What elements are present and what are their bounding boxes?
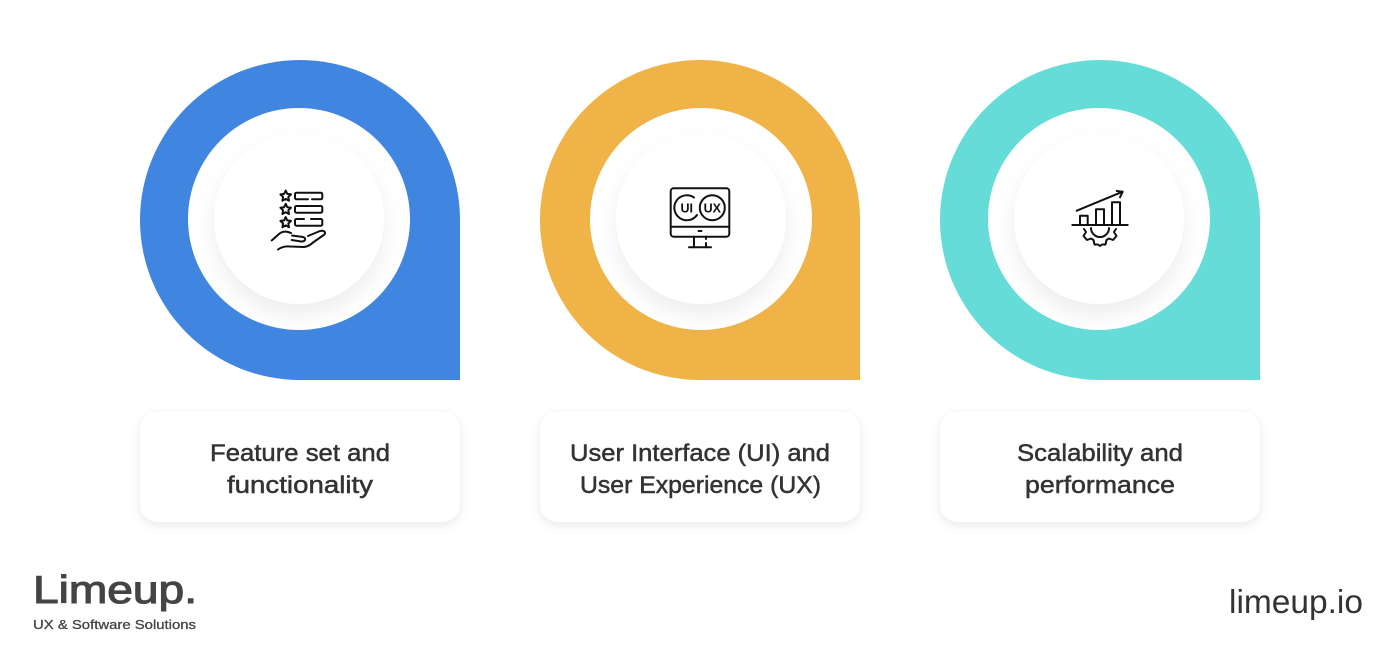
icon: monitor with UI and UX: UX [704,201,722,215]
panel: feature set [140,60,460,522]
logo: UX & Software Solutions [33,617,197,632]
blue teardrop [140,60,460,380]
label card: performance [1025,472,1175,499]
label card [940,412,1260,522]
teal teardrop [940,60,1260,380]
white outer circle [988,108,1210,330]
website address: limeup.io [1229,583,1363,620]
panel: scalability [940,60,1260,522]
white outer circle [590,108,812,330]
label card: Scalability and [1017,440,1183,467]
panel: UI and UX [540,60,860,522]
icon: stars list on open hand [272,190,325,250]
white inner circle with shadow [1014,134,1184,304]
white inner circle with shadow [214,134,384,304]
label card: functionality [227,472,374,499]
icon: growth chart over gear [1072,191,1128,246]
icon: monitor with UI and UX: UI [680,201,693,215]
icon: monitor with UI and UX [671,188,729,247]
label card [540,412,860,522]
label card: User Interface (UI) and [570,440,830,467]
label card [140,412,460,522]
white inner circle with shadow [616,134,786,304]
white outer circle [188,108,410,330]
logo [33,569,197,632]
label card: User Experience (UX) [580,472,821,499]
amber teardrop [540,60,860,380]
logo: Limeup. [33,569,197,612]
label card: Feature set and [210,440,390,467]
